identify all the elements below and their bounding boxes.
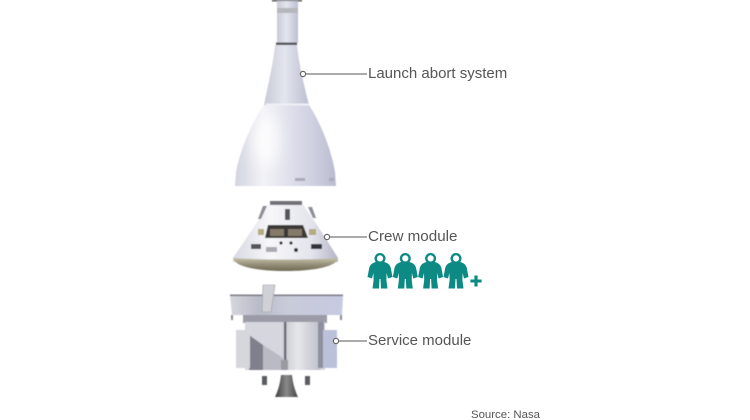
callout: crew module — [324, 228, 457, 245]
icon: astronaut 2 — [393, 253, 418, 288]
icon: astronaut 1 — [368, 253, 392, 288]
launch abort system illustration — [235, 0, 336, 186]
icon: plus sign — [470, 276, 482, 286]
service module illustration — [230, 285, 343, 397]
icon: astronaut 3 — [418, 253, 443, 288]
callout: launch abort system: Launch abort system — [368, 65, 507, 82]
callout: crew module: Crew module — [368, 228, 457, 245]
icon: astronaut 4 — [444, 253, 468, 288]
callout: launch abort system — [300, 65, 507, 82]
crew module illustration — [233, 201, 338, 271]
callout: service module: Service module — [368, 332, 471, 349]
icon: four crew members plus — [368, 253, 482, 288]
